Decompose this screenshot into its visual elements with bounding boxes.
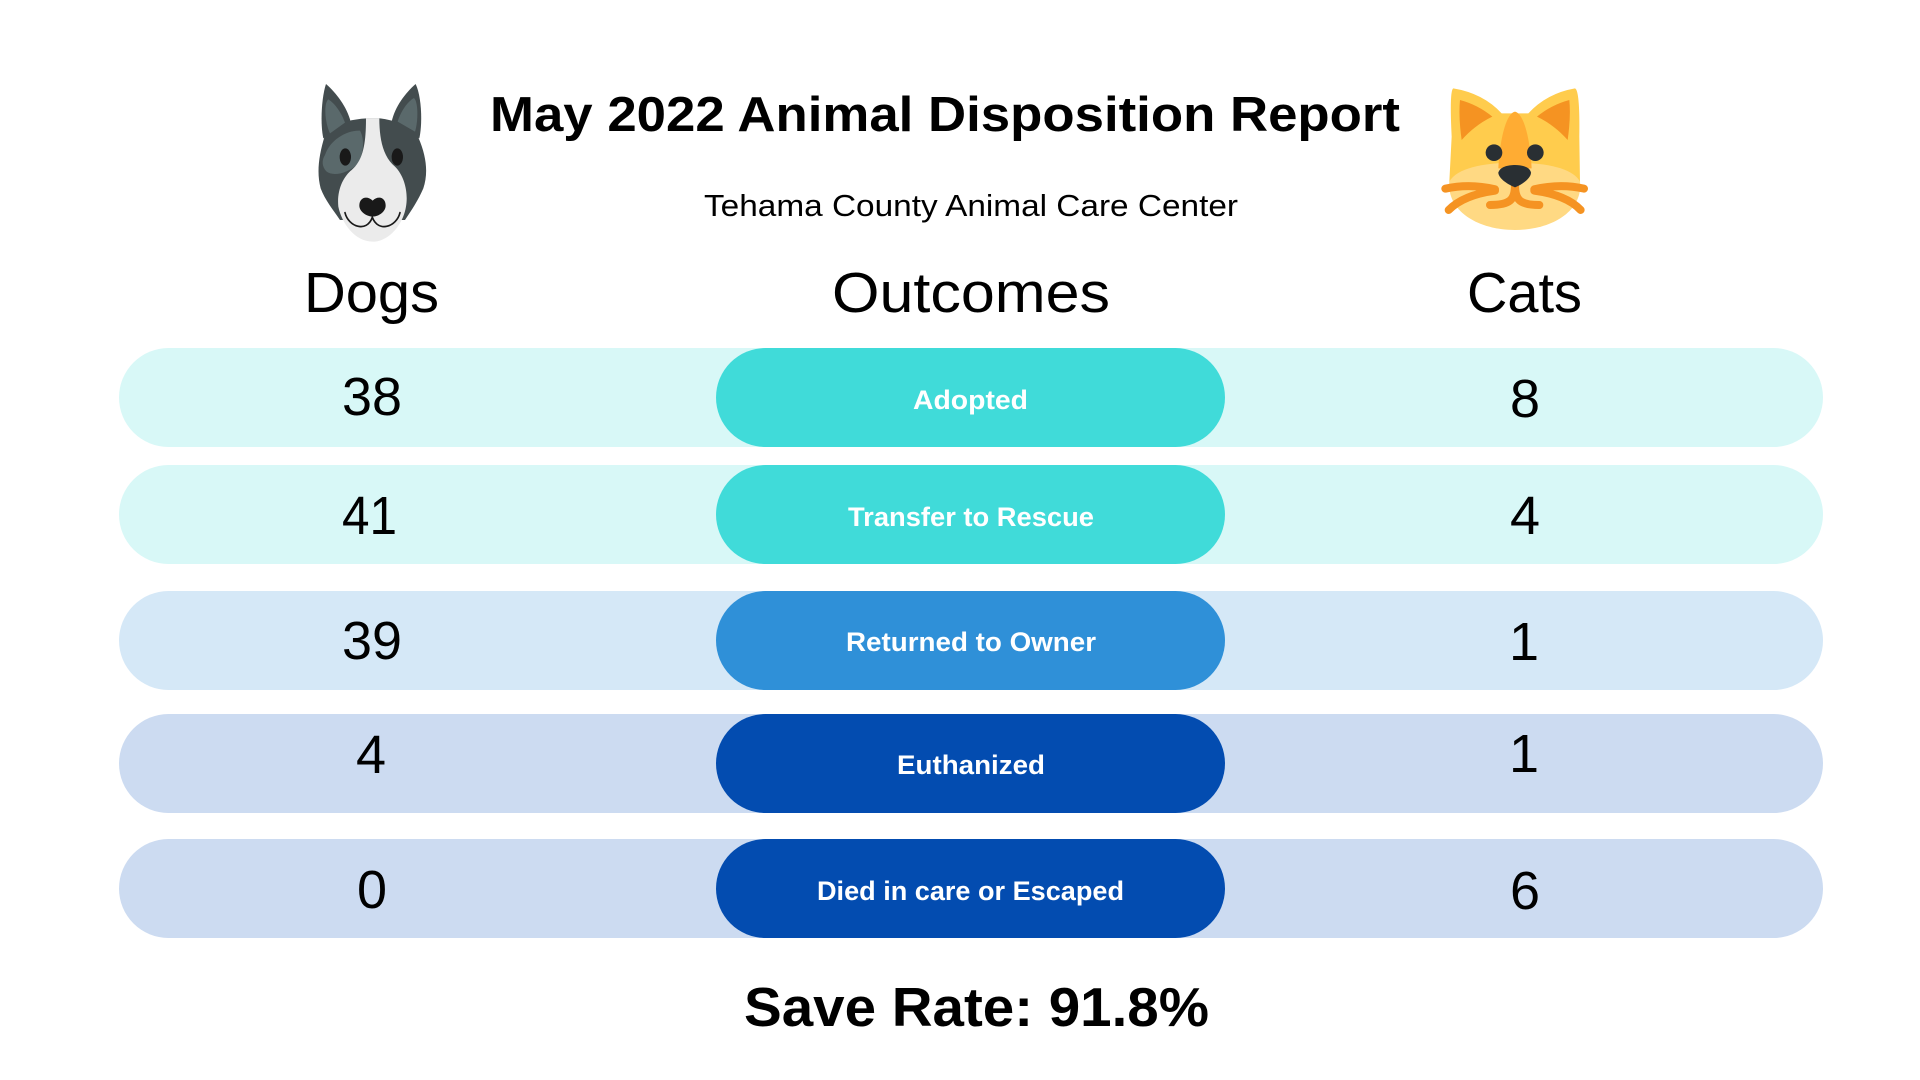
dog count: 39 xyxy=(342,611,402,671)
outcome label: Euthanized xyxy=(897,750,1045,780)
row: euthanized xyxy=(119,714,1823,813)
outcome label: Transfer to Rescue xyxy=(848,502,1094,532)
dog count: 4 xyxy=(356,725,386,785)
row: transfer to rescue xyxy=(119,465,1823,564)
dog count: 0 xyxy=(357,860,387,920)
subtitle: Tehama County Animal Care Center xyxy=(704,188,1238,223)
column heading: dogs: Dogs xyxy=(304,261,439,325)
dog count: 38 xyxy=(342,367,402,427)
outcome label: Adopted xyxy=(913,385,1028,415)
row bar xyxy=(119,465,1823,564)
row: returned to owner xyxy=(119,591,1823,690)
outcome pill xyxy=(716,348,1225,447)
icon: dog face xyxy=(319,84,426,242)
save rate callout: Save Rate: 91.8% xyxy=(744,976,1209,1038)
row: died in care or escaped xyxy=(119,839,1823,938)
cat count: 8 xyxy=(1510,369,1540,429)
outcome pill xyxy=(716,591,1225,690)
outcome pill xyxy=(716,465,1225,564)
row bar xyxy=(119,839,1823,938)
title: May 2022 Animal Disposition Report xyxy=(490,87,1400,142)
outcome label: Died in care or Escaped xyxy=(817,876,1124,906)
outcome label: Returned to Owner xyxy=(846,627,1096,657)
outcome pill xyxy=(716,839,1225,938)
column heading: outcomes: Outcomes xyxy=(832,261,1110,325)
column heading: cats: Cats xyxy=(1467,261,1582,325)
row bar xyxy=(119,714,1823,813)
outcome pill xyxy=(716,714,1225,813)
cat count: 6 xyxy=(1510,861,1540,921)
cat count: 1 xyxy=(1509,724,1539,784)
row bar xyxy=(119,348,1823,447)
cat count: 4 xyxy=(1510,486,1540,546)
icon: cat face xyxy=(1445,88,1584,230)
cat count: 1 xyxy=(1509,612,1539,672)
dog count: 41 xyxy=(342,486,397,546)
row bar xyxy=(119,591,1823,690)
row: adopted xyxy=(119,348,1823,447)
